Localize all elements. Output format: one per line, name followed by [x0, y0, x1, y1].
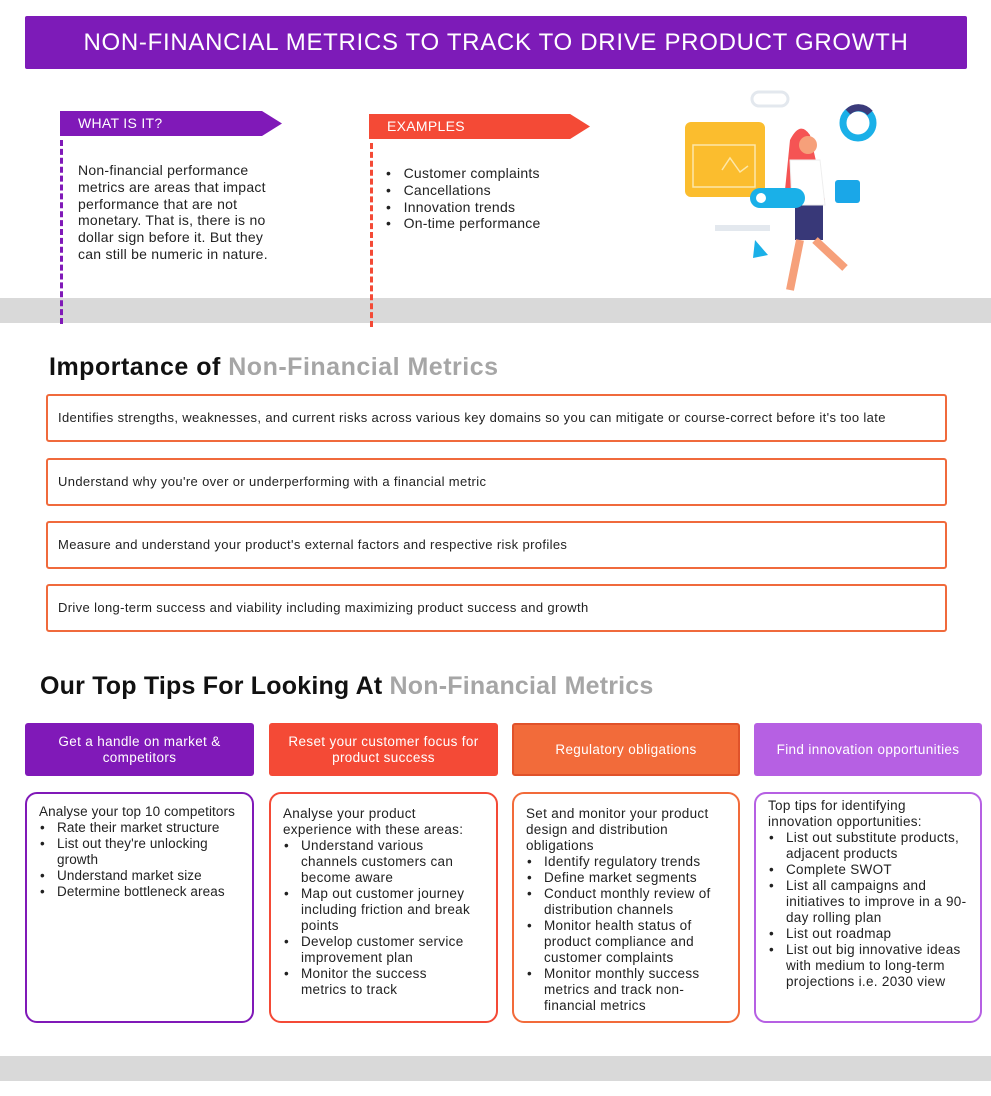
importance item 4	[46, 584, 947, 632]
tip box 4: Complete SWOT	[786, 862, 892, 877]
examples list	[386, 165, 541, 231]
tip box 3: Set and monitor your product design and distribution obligations	[526, 806, 708, 853]
tip box 3: Monitor monthly success metrics and track non-financial metrics	[544, 966, 699, 1013]
tip box 4: List out roadmap	[786, 926, 891, 941]
tip box 3: Conduct monthly review of distribution channels	[544, 886, 711, 917]
tip header 3: Regulatory obligations	[555, 742, 697, 756]
tip box 4: Top tips for identifying innovation opportunities:	[768, 798, 922, 829]
tip box 1: Rate their market structure	[57, 820, 220, 835]
importance item 1: Identifies strengths, weaknesses, and current risks across various key domains so you can mitigate or course-correct before it's too late	[58, 410, 886, 425]
tip header 3	[512, 723, 740, 776]
importance item 4: Drive long-term success and viability including maximizing product success and growth	[58, 600, 589, 615]
tip box 1: Analyse your top 10 competitors	[39, 804, 235, 819]
tip header 2: Reset your customer focus for product success	[288, 734, 479, 764]
importance item 2	[46, 458, 947, 506]
importance item 2: Understand why you're over or underperforming with a financial metric	[58, 474, 486, 489]
title	[25, 16, 967, 69]
importance item 1	[46, 394, 947, 442]
tip box 2	[269, 792, 498, 1023]
tip box 2: Monitor the success metrics to track	[301, 966, 427, 997]
tip box 2: Analyse your product experience with these areas:	[283, 806, 463, 837]
tip box 2: Understand various channels customers can become aware	[301, 838, 453, 885]
tip box 1: Determine bottleneck areas	[57, 884, 225, 899]
tip box 4: List out substitute products, adjacent products	[786, 830, 959, 861]
tag: examples: EXAMPLES	[387, 118, 465, 134]
examples list: • Customer complaints	[386, 165, 540, 181]
tip box 1: List out they're unlocking growth	[57, 836, 208, 867]
tip header 4: Find innovation opportunities	[777, 742, 959, 756]
heading: importance: Importance of Non-Financial Metrics	[49, 353, 499, 381]
examples list: • Innovation trends	[386, 199, 515, 215]
illustration: woman with charts	[685, 90, 876, 291]
tag: examples	[369, 114, 590, 139]
tip header 1: Get a handle on market & competitors	[58, 734, 221, 764]
importance item 3	[46, 521, 947, 569]
text: definition: Non-financial performance metrics are areas that impact performance that are not monetary. That is, there is no dollar sign before it. But they can still be numeric in nature.	[78, 162, 268, 262]
heading: top tips: Our Top Tips For Looking At Non-Financial Metrics	[40, 672, 654, 700]
tip box 1: Understand market size	[57, 868, 202, 883]
tip header 1	[25, 723, 254, 776]
tag: what is it	[60, 111, 282, 136]
tip header 2	[269, 723, 498, 776]
tip box 2: Map out customer journey including friction and break points	[301, 886, 470, 933]
tip header 4	[754, 723, 982, 776]
tip box 3: Identify regulatory trends	[544, 854, 700, 869]
tip box 3	[512, 792, 740, 1023]
title: NON-FINANCIAL METRICS TO TRACK TO DRIVE PRODUCT GROWTH	[84, 29, 908, 56]
importance item 3: Measure and understand your product's external factors and respective risk profiles	[58, 537, 567, 552]
tip box 2: Develop customer service improvement plan	[301, 934, 464, 965]
tip box 3: Monitor health status of product compliance and customer complaints	[544, 918, 694, 965]
tip box 4: List all campaigns and initiatives to improve in a 90-day rolling plan	[786, 878, 966, 925]
examples list: • On-time performance	[386, 215, 541, 231]
tip box 4	[754, 792, 982, 1023]
tip box 1	[25, 792, 254, 1023]
examples list: • Cancellations	[386, 182, 491, 198]
tag: what is it: WHAT IS IT?	[78, 115, 162, 131]
tip box 3: Define market segments	[544, 870, 697, 885]
tip box 4: List out big innovative ideas with medium to long-term projections i.e. 2030 view	[786, 942, 961, 989]
